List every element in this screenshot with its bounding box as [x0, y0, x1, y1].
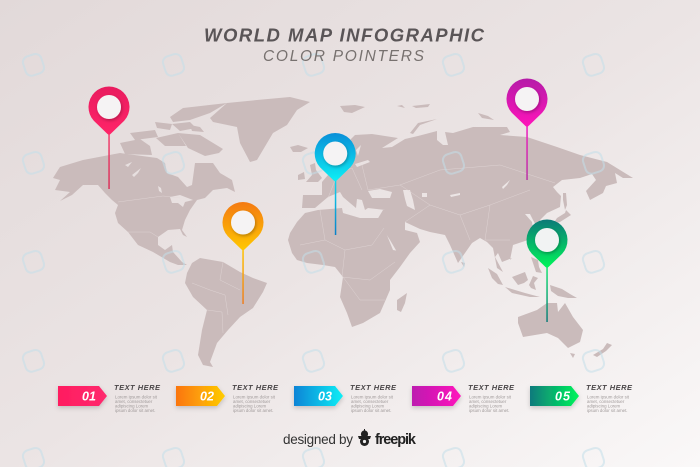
- legend item 01: 01: [82, 390, 96, 404]
- map: Arctic islands: [120, 103, 227, 156]
- legend item 04: 04: [437, 390, 452, 404]
- legend item 01: Lorem ipsum dolor sit: [115, 394, 158, 400]
- map: North America: [53, 153, 235, 265]
- icon: freepik mascot: [358, 429, 371, 446]
- legend item 03: 03: [318, 390, 332, 404]
- legend item 03: [294, 383, 397, 413]
- country borders: [118, 165, 555, 333]
- legend item 05: [530, 383, 633, 413]
- map: Greenland: [210, 97, 310, 162]
- legend item 04: Lorem ipsum dolor sit: [469, 394, 512, 400]
- legend item 04: amet, consectetuer: [469, 399, 507, 404]
- map: Eurasia: [302, 127, 633, 272]
- legend item 05: adipiscing Lorem: [587, 404, 621, 408]
- freepik credit: [283, 429, 417, 448]
- subheading: COLOR POINTERS: [263, 48, 425, 65]
- heading: WORLD MAP INFOGRAPHIC: [204, 24, 485, 46]
- freepik credit: freepik: [375, 432, 417, 448]
- legend item 04: TEXT HERE: [468, 383, 515, 392]
- legend item 02: 02: [200, 390, 214, 404]
- legend item 01: adipiscing Lorem: [115, 404, 149, 408]
- legend item 02: adipiscing Lorem: [233, 404, 267, 408]
- world map: [53, 97, 633, 367]
- pointer: blue: [315, 133, 356, 235]
- legend item 03: Lorem ipsum dolor sit: [351, 394, 394, 400]
- map: Iceland: [290, 145, 308, 152]
- legend item 03: amet, consectetuer: [351, 399, 389, 404]
- legend item 01: ipsum dolor sit amet.: [115, 408, 156, 413]
- legend item 01: amet, consectetuer: [115, 399, 153, 404]
- map: Australia: [518, 303, 583, 348]
- pointer: green: [526, 220, 568, 322]
- map: Africa: [288, 208, 410, 327]
- map: Madagascar: [397, 293, 407, 312]
- map: Tasmania and New Zealand: [570, 343, 612, 358]
- watermark pattern: [21, 52, 606, 467]
- legend item 04: [412, 383, 515, 413]
- legend item 02: ipsum dolor sit amet.: [233, 408, 274, 413]
- pointer: orange: [222, 202, 264, 304]
- legend item 04: ipsum dolor sit amet.: [469, 408, 510, 413]
- pointer: magenta: [506, 79, 548, 180]
- map: Southeast Asia islands: [488, 257, 577, 298]
- legend item 01: TEXT HERE: [114, 383, 161, 392]
- legend item 03: TEXT HERE: [350, 383, 397, 392]
- legend item 02: TEXT HERE: [232, 383, 279, 392]
- legend item 05: TEXT HERE: [586, 383, 633, 392]
- map: Novaya Zemlya and Arctic Russia: [340, 104, 494, 134]
- legend item 02: Lorem ipsum dolor sit: [233, 394, 276, 400]
- freepik credit: designed by: [283, 432, 353, 447]
- legend item 05: Lorem ipsum dolor sit: [587, 394, 630, 400]
- legend item 05: 05: [555, 390, 571, 404]
- legend item 05: amet, consectetuer: [587, 399, 625, 404]
- legend item 05: ipsum dolor sit amet.: [587, 408, 628, 413]
- legend item 02: [176, 383, 279, 413]
- legend item 02: amet, consectetuer: [233, 399, 271, 404]
- map: UK and Ireland: [298, 163, 322, 182]
- legend item 04: adipiscing Lorem: [469, 404, 503, 408]
- legend item 03: adipiscing Lorem: [351, 404, 385, 408]
- pointer: red: [88, 87, 130, 189]
- title: [204, 24, 485, 65]
- legend item 03: ipsum dolor sit amet.: [351, 408, 392, 413]
- map: Japan and Sakhalin: [553, 193, 571, 224]
- map: Sri Lanka: [461, 262, 465, 267]
- map: South America: [185, 258, 267, 367]
- legend item 01: [58, 383, 161, 413]
